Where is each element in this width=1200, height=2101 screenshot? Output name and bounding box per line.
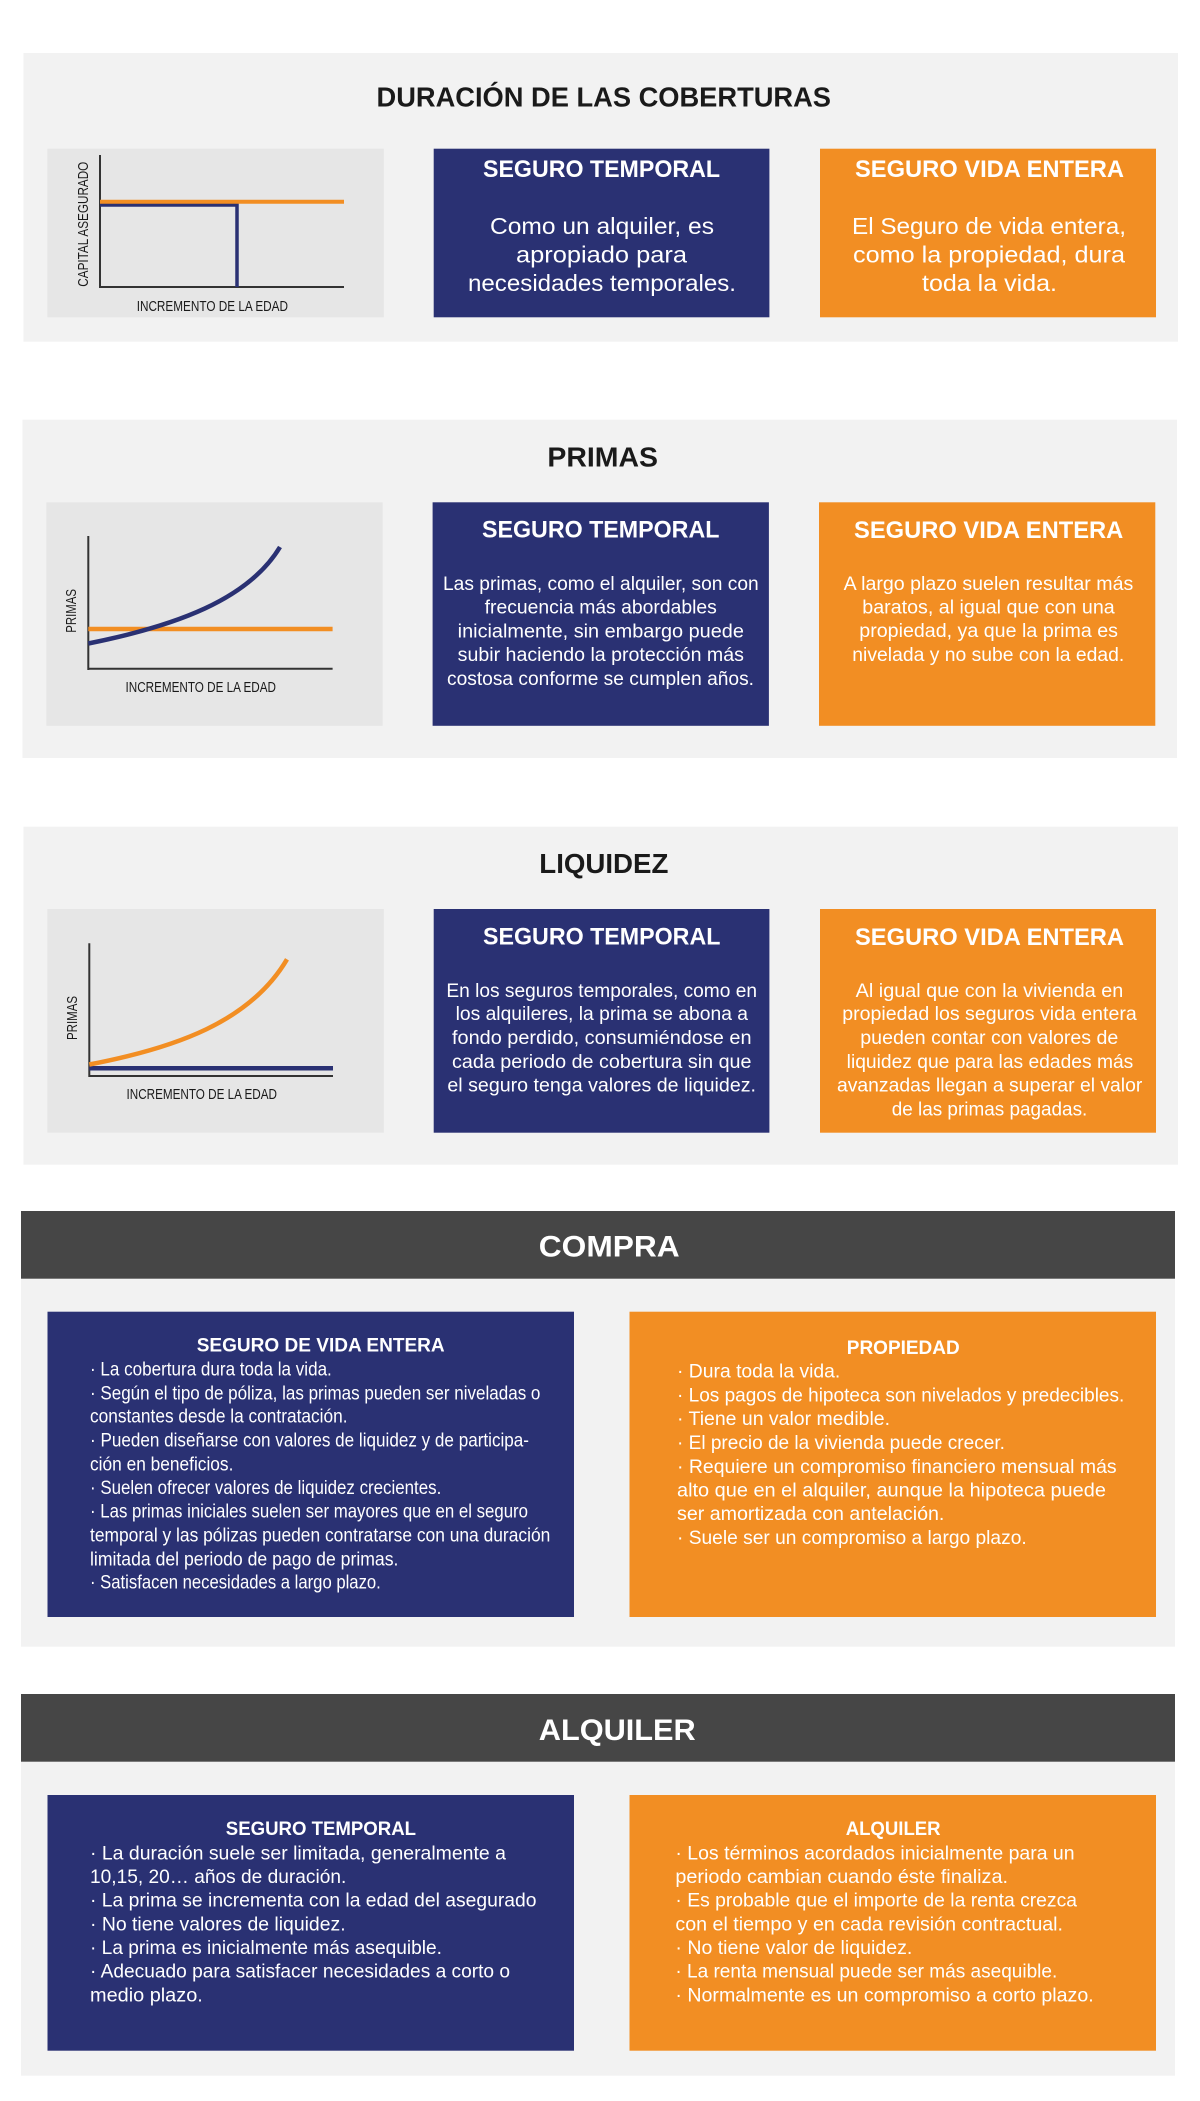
panel: compra — [21, 1211, 1175, 1647]
card: seguro temporal: inicialmente, sin embargo puede — [458, 621, 744, 642]
card: seguro de vida entera: · La cobertura dura toda la vida. — [90, 1359, 332, 1381]
card: seguro de vida entera — [48, 1312, 574, 1617]
panel: duración de las coberturas — [24, 53, 1178, 342]
card: seguro temporal: cada periodo de cobertura sin que — [452, 1052, 752, 1073]
card: seguro vida entera: baratos, al igual que con una — [862, 598, 1115, 618]
card: seguro de vida entera: ción en beneficios. — [90, 1454, 233, 1476]
card: seguro vida entera — [820, 149, 1156, 317]
card: propiedad — [630, 1312, 1156, 1617]
card: seguro temporal: medio plazo. — [90, 1984, 203, 2006]
card: seguro vida entera — [819, 502, 1155, 726]
card: seguro temporal: costosa conforme se cumplen años. — [447, 669, 754, 690]
chart: liquidez: PRIMAS — [64, 996, 81, 1040]
card: seguro temporal: los alquileres, la prima se abona a — [456, 1004, 748, 1025]
card: seguro vida entera: liquidez que para las edades más — [847, 1052, 1133, 1073]
card: seguro temporal: apropiado para — [516, 242, 687, 268]
card: propiedad: PROPIEDAD — [847, 1337, 960, 1359]
card: alquiler: ALQUILER — [846, 1818, 941, 1840]
card: propiedad: · Requiere un compromiso financiero mensual más — [677, 1456, 1117, 1478]
card: seguro temporal: Como un alquiler, es — [490, 213, 714, 239]
card: seguro de vida entera: · Según el tipo de póliza, las primas pueden ser niveladas o — [90, 1382, 541, 1404]
card: seguro temporal: 10,15, 20… años de duración. — [90, 1866, 346, 1888]
card: seguro vida entera: A largo plazo suelen resultar más — [844, 574, 1133, 595]
card: seguro temporal: · La prima se incrementa con la edad del asegurado — [90, 1889, 537, 1911]
card: seguro temporal: fondo perdido, consumiéndose en — [452, 1028, 752, 1049]
card: seguro vida entera: SEGURO VIDA ENTERA — [854, 517, 1123, 544]
card: seguro temporal: · Adecuado para satisfacer necesidades a corto o — [90, 1960, 510, 1982]
card: seguro temporal: necesidades temporales. — [468, 270, 736, 296]
card: seguro temporal: · No tiene valores de liquidez. — [90, 1913, 346, 1935]
header bar: alquiler: ALQUILER — [539, 1714, 696, 1747]
chart: liquidez — [47, 909, 384, 1133]
card: seguro temporal — [434, 909, 769, 1133]
card: seguro temporal: subir haciendo la protección más — [458, 645, 744, 666]
card: propiedad: · Dura toda la vida. — [677, 1361, 840, 1383]
card: seguro vida entera: El Seguro de vida entera, — [852, 213, 1126, 239]
card: seguro de vida entera: · Satisfacen necesidades a largo plazo. — [90, 1572, 381, 1594]
card: seguro de vida entera: temporal y las pólizas pueden contratarse con una duración — [90, 1525, 550, 1547]
header bar: compra: COMPRA — [539, 1231, 680, 1264]
card: seguro temporal: SEGURO TEMPORAL — [226, 1818, 416, 1840]
card: seguro vida entera: nivelada y no sube con la edad. — [852, 645, 1124, 666]
panel: liquidez — [24, 827, 1178, 1165]
card: seguro temporal: frecuencia más abordables — [485, 598, 717, 618]
card: seguro temporal: · La duración suele ser limitada, generalmente a — [90, 1842, 506, 1864]
card: seguro temporal — [433, 502, 769, 726]
card: seguro temporal — [48, 1795, 574, 2051]
card: seguro de vida entera: SEGURO DE VIDA ENTERA — [197, 1335, 445, 1357]
card: propiedad: · El precio de la vivienda puede crecer. — [677, 1432, 1005, 1454]
chart: liquidez: INCREMENTO DE LA EDAD — [126, 1086, 277, 1103]
card: seguro vida entera: de las primas pagadas. — [892, 1099, 1087, 1120]
panel: primas — [22, 420, 1177, 758]
card: seguro vida entera — [820, 909, 1156, 1133]
chart: primas — [46, 502, 383, 726]
card: alquiler: · La renta mensual puede ser más asequible. — [675, 1960, 1057, 1982]
heading: duración de las coberturas: DURACIÓN DE LAS COBERTURAS — [376, 82, 831, 112]
card: alquiler: · Es probable que el importe de la renta crezca — [675, 1889, 1077, 1911]
card: alquiler: · Los términos acordados inicialmente para un — [675, 1842, 1075, 1864]
card: alquiler: con el tiempo y en cada revisión contractual. — [675, 1913, 1063, 1935]
card: seguro de vida entera: · Pueden diseñarse con valores de liquidez y de participa- — [90, 1430, 529, 1452]
card: seguro vida entera: avanzadas llegan a superar el valor — [837, 1076, 1143, 1097]
header bar: compra — [21, 1211, 1175, 1279]
card: seguro temporal: · La prima es inicialmente más asequible. — [90, 1937, 442, 1959]
heading: liquidez: LIQUIDEZ — [539, 848, 668, 879]
panel: alquiler — [21, 1694, 1175, 2076]
card: seguro temporal: el seguro tenga valores de liquidez. — [447, 1076, 756, 1097]
card: seguro vida entera: propiedad, ya que la prima es — [859, 621, 1118, 642]
card: seguro vida entera: SEGURO VIDA ENTERA — [855, 924, 1124, 951]
chart: primas: PRIMAS — [63, 589, 80, 633]
card: propiedad: · Los pagos de hipoteca son nivelados y predecibles. — [677, 1385, 1124, 1407]
card: seguro temporal: En los seguros temporales, como en — [446, 981, 757, 1002]
card: seguro de vida entera: · Suelen ofrecer valores de liquidez crecientes. — [90, 1477, 441, 1499]
card: seguro temporal: SEGURO TEMPORAL — [482, 517, 719, 544]
card: propiedad: ser amortizada con antelación. — [677, 1503, 944, 1525]
card: seguro de vida entera: constantes desde la contratación. — [90, 1406, 348, 1428]
card: seguro temporal: SEGURO TEMPORAL — [483, 924, 720, 950]
card: seguro vida entera: SEGURO VIDA ENTERA — [855, 156, 1124, 183]
card: seguro vida entera: toda la vida. — [922, 270, 1057, 296]
card: alquiler: periodo cambian cuando éste finaliza. — [675, 1866, 1008, 1888]
card: seguro vida entera: propiedad los seguros vida entera — [842, 1004, 1137, 1025]
header bar: alquiler — [21, 1694, 1175, 1762]
card: seguro vida entera: como la propiedad, dura — [853, 242, 1125, 268]
card: propiedad: · Suele ser un compromiso a largo plazo. — [677, 1527, 1027, 1549]
chart: capital asegurado — [47, 149, 384, 317]
card: seguro de vida entera: limitada del periodo de pago de primas. — [90, 1549, 398, 1571]
card: propiedad: alto que en el alquiler, aunque la hipoteca puede — [677, 1480, 1106, 1502]
card: seguro temporal: SEGURO TEMPORAL — [483, 156, 720, 183]
card: seguro vida entera: pueden contar con valores de — [860, 1028, 1118, 1049]
chart: primas: INCREMENTO DE LA EDAD — [126, 679, 276, 696]
heading: primas: PRIMAS — [547, 442, 658, 473]
card: seguro temporal: Las primas, como el alquiler, son con — [443, 574, 759, 595]
card: alquiler — [630, 1795, 1156, 2051]
card: seguro de vida entera: · Las primas iniciales suelen ser mayores que en el seguro — [90, 1501, 528, 1523]
card: seguro vida entera: Al igual que con la vivienda en — [856, 981, 1123, 1002]
card: alquiler: · No tiene valor de liquidez. — [675, 1937, 912, 1959]
chart: capital asegurado: CAPITAL ASEGURADO — [75, 162, 92, 287]
card: propiedad: · Tiene un valor medible. — [677, 1408, 890, 1430]
chart: capital asegurado: INCREMENTO DE LA EDAD — [137, 298, 288, 315]
card: alquiler: · Normalmente es un compromiso a corto plazo. — [675, 1984, 1094, 2006]
card: seguro temporal — [434, 149, 769, 317]
